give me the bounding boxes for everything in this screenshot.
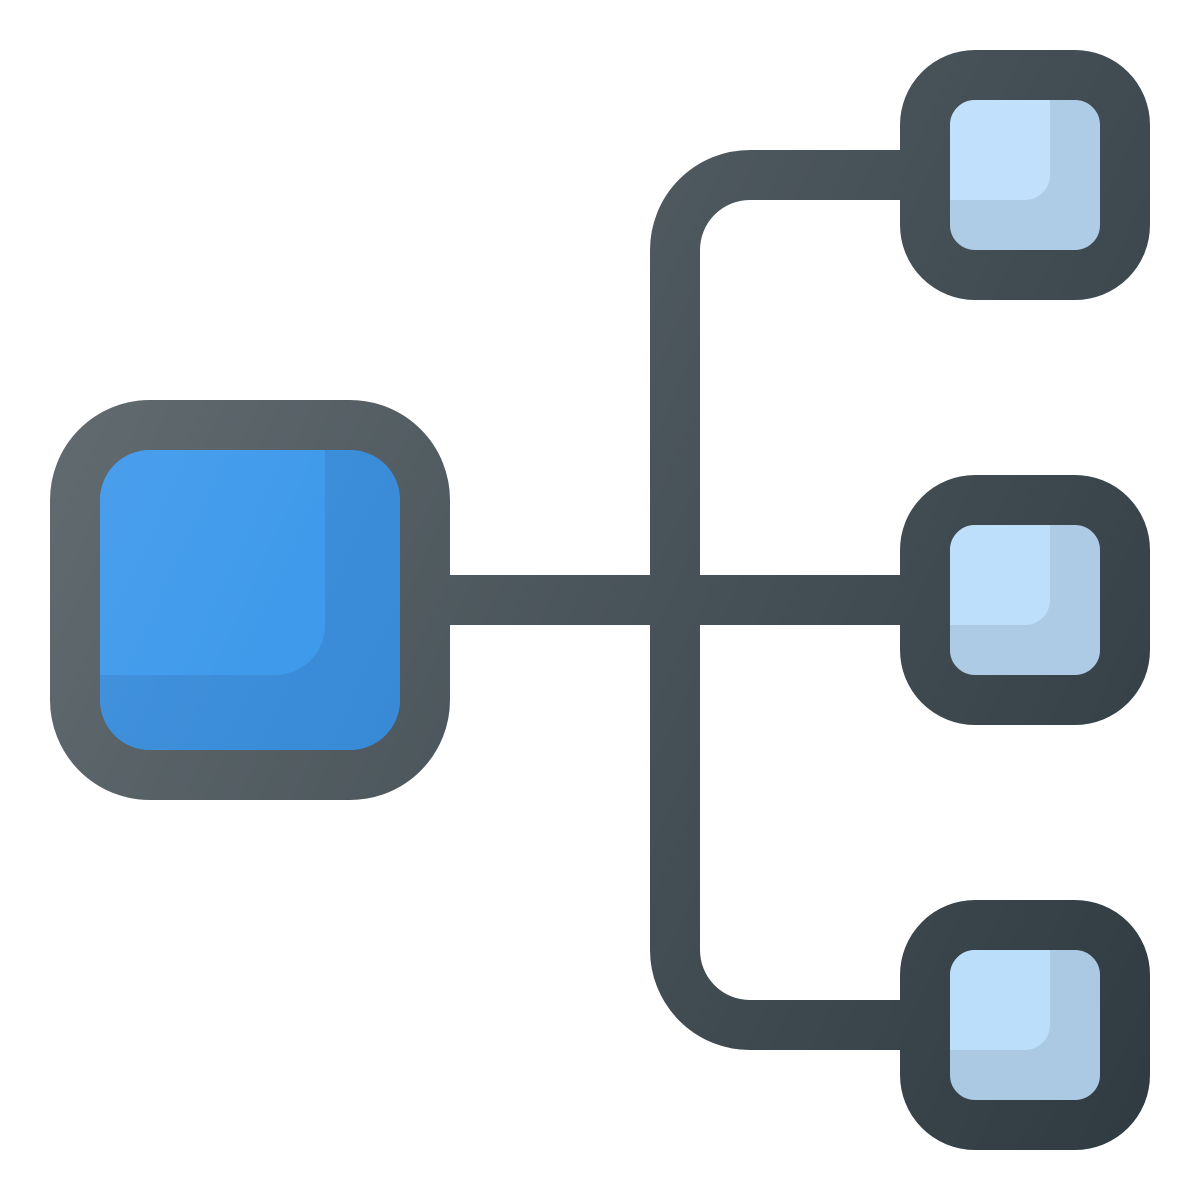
connector lines <box>450 175 900 1025</box>
child node: top <box>925 75 1125 275</box>
root node: large blue square <box>75 425 425 775</box>
child node: bottom <box>925 925 1125 1125</box>
child node: middle <box>925 500 1125 700</box>
